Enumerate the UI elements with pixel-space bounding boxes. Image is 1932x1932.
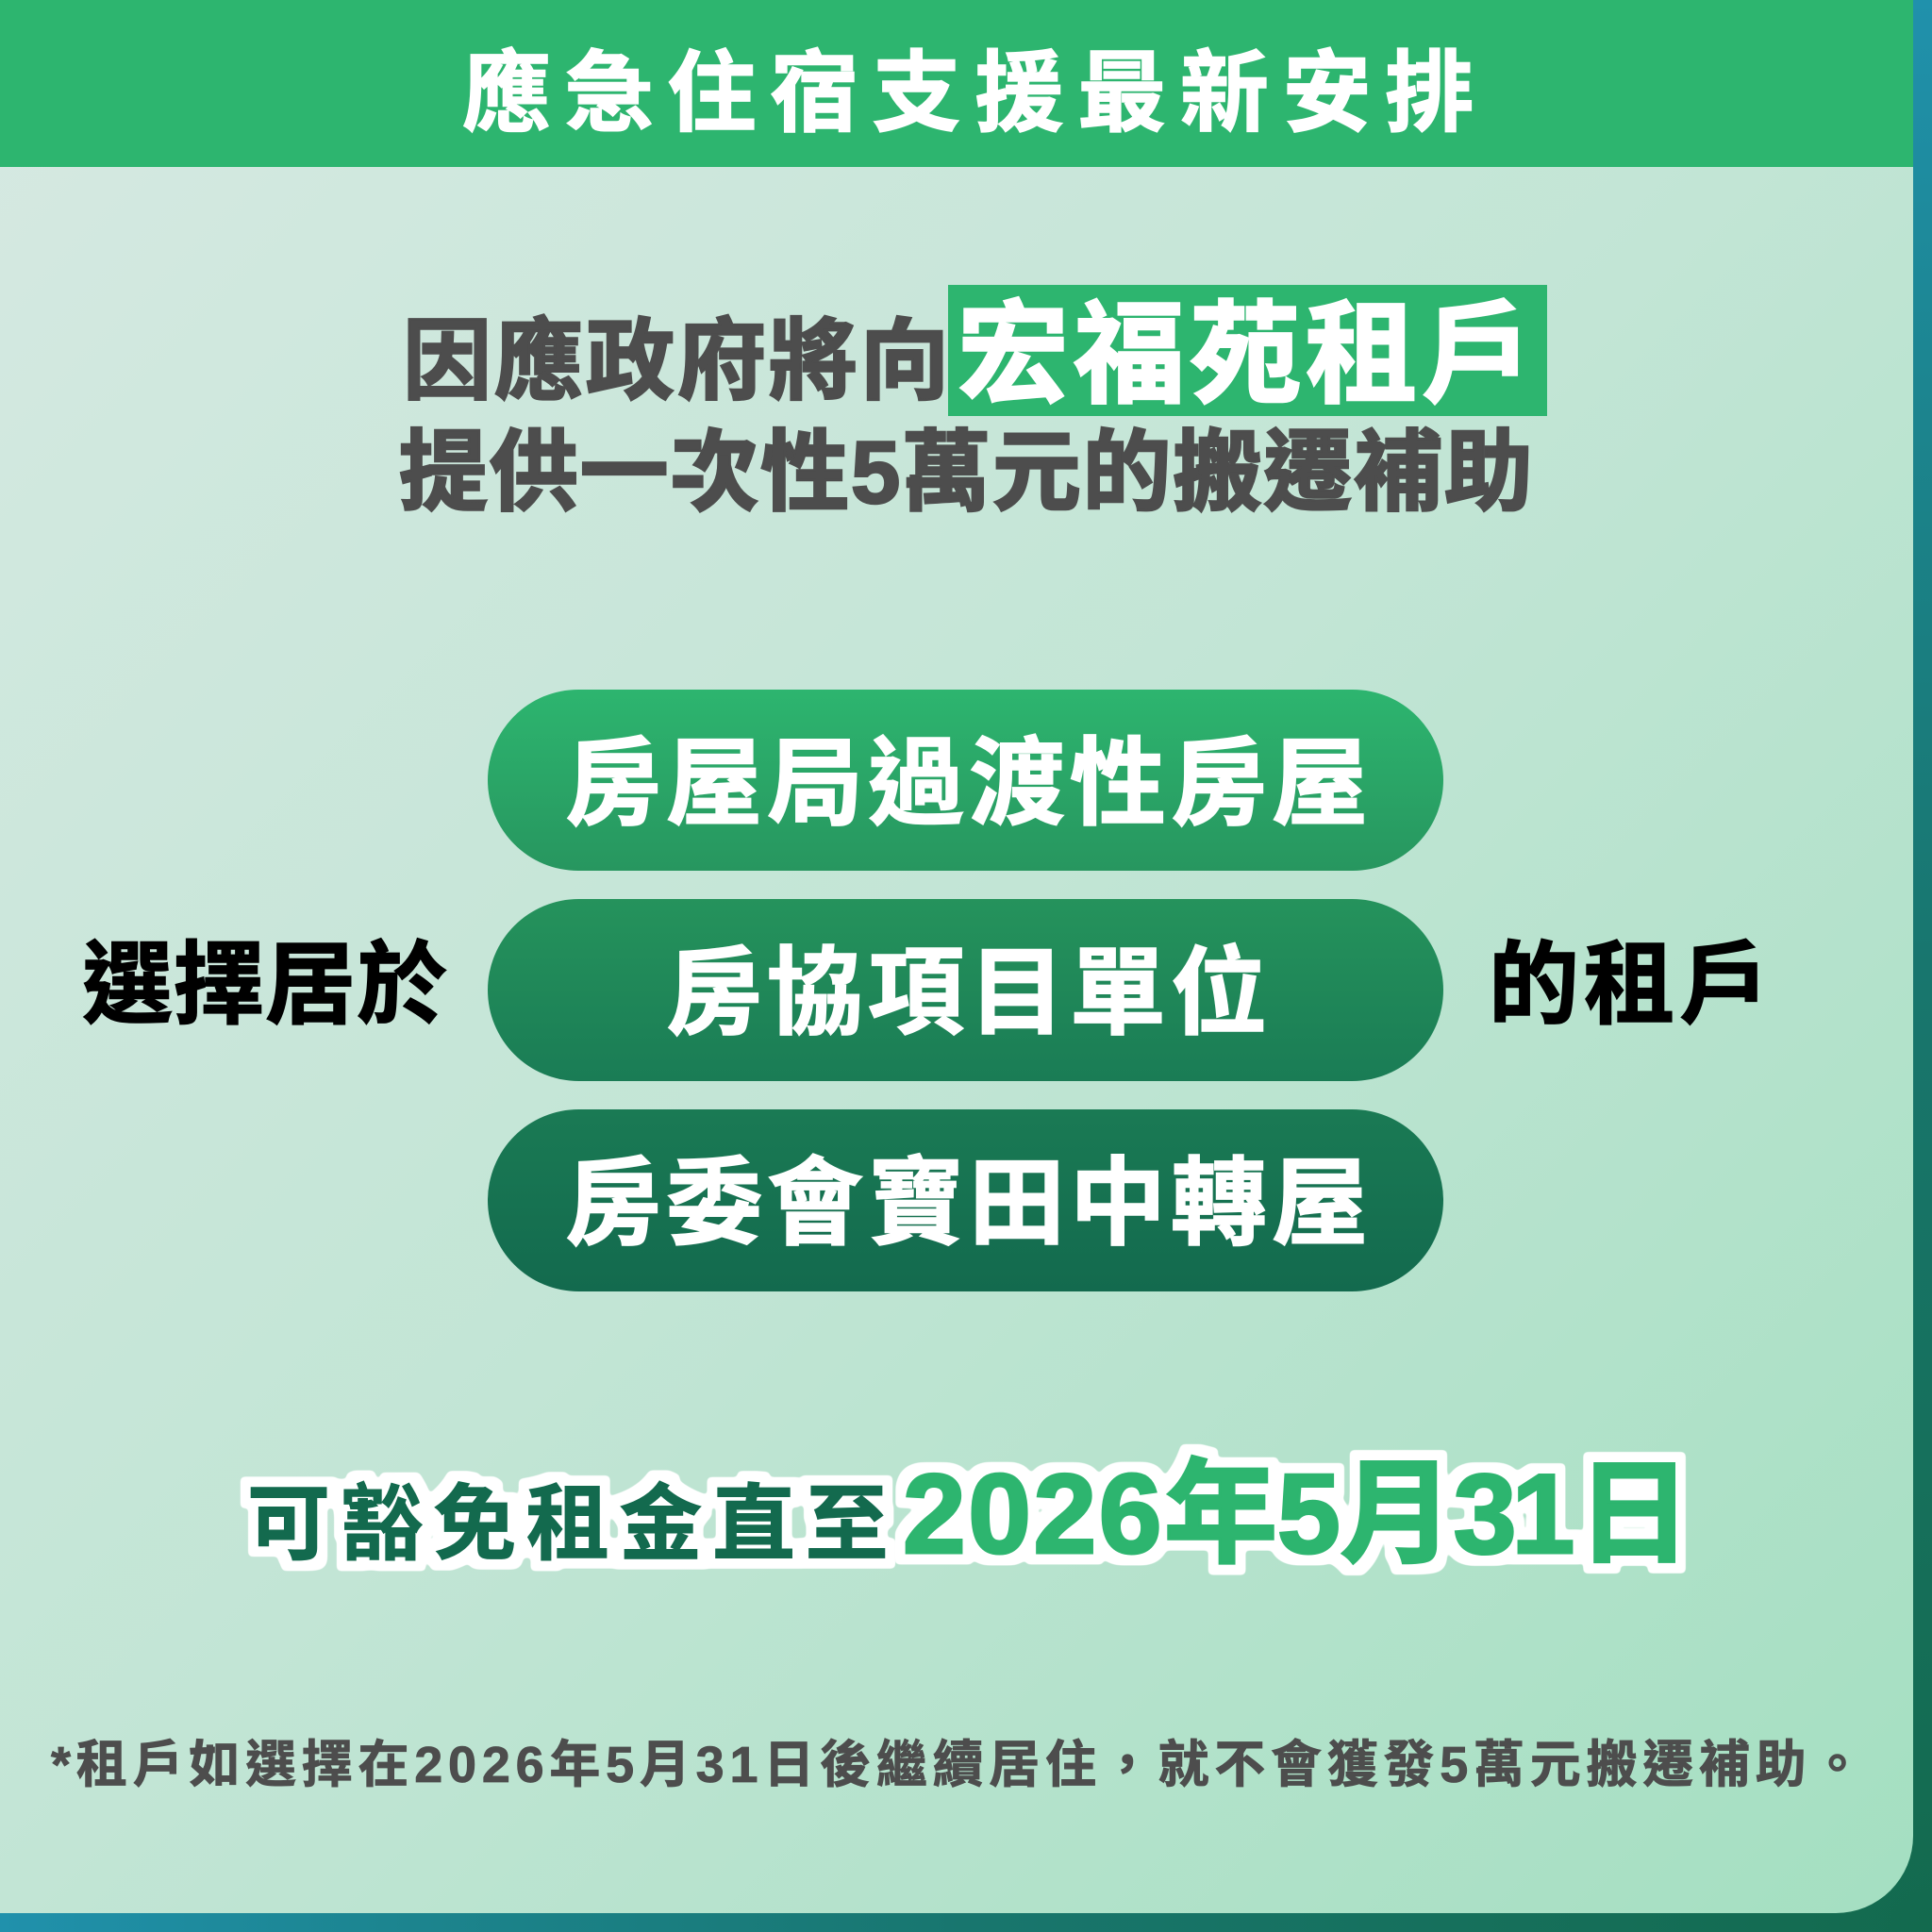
pill: transitional housing — [488, 690, 1443, 871]
pill: Housing Society units — [488, 899, 1443, 1081]
intro text line 2: 提供一次性5萬元的搬遷補助 — [399, 423, 1535, 522]
intro text line 1: 因應政府將向 — [403, 311, 952, 410]
rent exemption date: 2026年5月31日 — [903, 1451, 1690, 1577]
highlight: Wang Fuk Court tenants — [948, 285, 1547, 416]
highlight text: 宏福苑租戶 — [958, 293, 1538, 418]
rent exemption line: 可豁免租金直至 — [247, 1477, 898, 1571]
pill text: 房協項目單位 — [666, 940, 1272, 1047]
header band — [0, 0, 1913, 167]
title: 應急住宿支援最新安排 — [462, 43, 1488, 142]
pill: Housing Authority interim housing — [488, 1109, 1443, 1291]
footnote: *租戶如選擇在2026年5月31日後繼續居住，就不會獲發5萬元搬遷補助。 — [51, 1737, 1868, 1793]
side label right: 的租戶 — [1489, 935, 1774, 1036]
side label left: 選擇居於 — [82, 935, 448, 1036]
pill text: 房屋局過渡性房屋 — [565, 730, 1373, 838]
pill text: 房委會寶田中轉屋 — [565, 1150, 1373, 1257]
